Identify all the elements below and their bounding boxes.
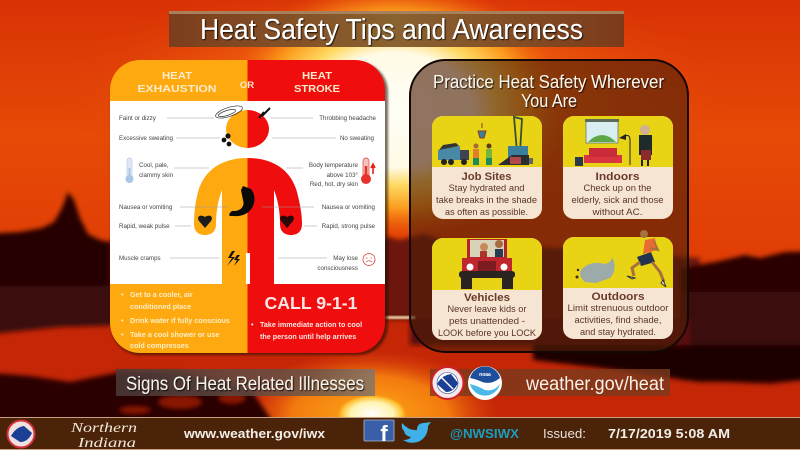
- text: Indoors: [596, 171, 640, 183]
- icon: dog and runner: [576, 230, 666, 287]
- exhaustion symptoms: clammy skin: [139, 172, 174, 179]
- text: elderly, sick and those: [572, 195, 664, 205]
- heading: heat exhaustion: HEAT: [162, 70, 193, 82]
- title: Heat Safety Tips and Awareness: [200, 14, 583, 46]
- exhaustion symptoms: Excessive sweating: [119, 135, 174, 142]
- text: Job Sites: [462, 171, 512, 183]
- exhaustion first aid: Take a cool shower or use: [130, 330, 219, 339]
- stroke symptoms: Throbbing headache: [319, 115, 377, 122]
- text: Stay hydrated and: [448, 183, 524, 193]
- text: Never leave kids or: [448, 304, 526, 314]
- text: without AC.: [591, 207, 642, 217]
- stroke symptoms: Body temperature: [309, 162, 359, 169]
- stroke first aid: Take immediate action to cool: [260, 320, 362, 329]
- icon: headache bolts: [259, 108, 270, 118]
- sun reflection: [339, 396, 406, 417]
- text: as often as possible.: [445, 207, 528, 217]
- icon: NOAA logo: noaa: [479, 372, 491, 378]
- title banner: [169, 11, 624, 47]
- exhaustion first aid: conditioned place: [130, 302, 191, 311]
- heading: heat stroke: [294, 70, 340, 95]
- heading: You Are: [521, 90, 577, 111]
- exhaustion symptoms: Nausea or vomiting: [119, 204, 173, 211]
- issued time: 7/17/2019 5:08 AM: [608, 426, 730, 441]
- exhaustion first aid: •: [121, 330, 124, 339]
- icon: facebook: f: [380, 421, 388, 446]
- text: take breaks in the shade: [436, 195, 537, 205]
- text: pets unattended -: [449, 316, 525, 326]
- text: Check up on the: [584, 183, 652, 193]
- icon: NWS logo small: [8, 420, 34, 448]
- stroke symptoms: May lose: [333, 255, 359, 262]
- symptom leader lines: [167, 118, 336, 258]
- heading: heat exhaustion: [138, 70, 216, 95]
- icon: room with sofa and elder: [575, 119, 652, 166]
- icon: twitter: [402, 422, 431, 443]
- icon: cool thermometer: [126, 158, 134, 183]
- exhaustion first aid: •: [121, 316, 124, 325]
- text: [572, 171, 664, 217]
- office name: Northern: [70, 421, 137, 436]
- icon: NWS logo: [432, 367, 464, 399]
- issued label: Issued:: [543, 427, 586, 441]
- stroke symptoms: Nausea or vomiting: [322, 204, 376, 211]
- website: www.weather.gov/iwx: [183, 426, 326, 441]
- panel: heat exhaustion vs heat stroke: [110, 60, 388, 355]
- exhaustion symptoms: Faint or dizzy: [119, 115, 157, 122]
- icon: red jeep with people: [459, 239, 515, 289]
- icon: stomach: [229, 186, 254, 216]
- stroke symptoms: No sweating: [340, 135, 375, 142]
- exhaustion symptoms: Cool, pale,: [139, 162, 169, 169]
- speckled dark bank patches: [119, 392, 246, 414]
- icon: sad face: [363, 254, 375, 266]
- icon: cramp lightning: [227, 251, 240, 266]
- exhaustion first aid: Get to a cooler, air: [130, 290, 193, 299]
- lower water: [0, 320, 800, 417]
- exhaustion symptoms: [119, 115, 174, 262]
- stroke symptoms: consciousness: [317, 265, 358, 272]
- body figure: [194, 103, 302, 284]
- caption: signs of heat related illnesses: Signs Of Heat Related Illnesses: [126, 374, 364, 395]
- text: Limit strenuous outdoor: [568, 303, 668, 313]
- bright water line: [385, 316, 415, 319]
- text: Outdoors: [592, 291, 644, 303]
- text: [436, 171, 537, 217]
- text: and stay hydrated.: [580, 327, 656, 337]
- icon: dizzy swirl: [214, 103, 244, 121]
- icon: NOAA logo: [468, 366, 502, 400]
- exhaustion symptoms: Rapid, weak pulse: [119, 223, 170, 230]
- icon: hot thermometer: [361, 158, 375, 184]
- card: job sites: [432, 116, 542, 219]
- stroke first aid: the person until help arrives: [260, 332, 356, 341]
- exhaustion symptoms: Muscle cramps: [119, 255, 161, 262]
- text: LOOK before you LOCK: [438, 328, 536, 338]
- footer bar: [0, 417, 800, 450]
- card: outdoors: [563, 230, 673, 339]
- stroke symptoms: Red, hot, dry skin: [310, 181, 359, 188]
- caption: weather.gov/heat with logos: [430, 366, 670, 400]
- stroke symptoms: Rapid, strong pulse: [322, 223, 376, 230]
- exhaustion first aid: [121, 290, 230, 350]
- card: indoors: [563, 116, 673, 219]
- heading: heat stroke: HEAT: [302, 70, 333, 82]
- text: Vehicles: [464, 292, 510, 304]
- stroke symptoms: [309, 115, 377, 272]
- heading: Practice Heat Safety Wherever: [433, 71, 664, 92]
- text: [568, 291, 668, 337]
- office name: [70, 421, 137, 450]
- label: or: OR: [240, 80, 254, 91]
- stroke first aid: •: [251, 320, 254, 329]
- stroke first aid: [251, 320, 362, 341]
- icon: heart right: [280, 216, 294, 228]
- exhaustion first aid: Drink water if fully conscious: [130, 316, 230, 325]
- heading: heat exhaustion: EXHAUSTION: [138, 83, 216, 95]
- icon: facebook: [364, 420, 394, 446]
- stroke symptoms: above 103°: [327, 172, 359, 179]
- icon: sweat drops: [222, 133, 231, 146]
- heading: [433, 71, 664, 111]
- panel: practice heat safety: [410, 60, 688, 352]
- exhaustion first aid: •: [121, 290, 124, 299]
- text: [438, 292, 536, 338]
- exhaustion first aid: cold compresses: [130, 341, 189, 350]
- icon: heart left: [198, 216, 212, 228]
- call 9-1-1: CALL 9-1-1: [264, 293, 358, 313]
- heading: heat stroke: STROKE: [294, 83, 340, 95]
- icon: truck, workers and crane: [438, 117, 533, 165]
- twitter handle: @NWSIWX: [450, 427, 520, 441]
- card: vehicles: [432, 238, 542, 340]
- tree line and banks: [0, 192, 800, 425]
- caption: weather.gov/heat with logos: weather.gov/heat: [525, 374, 665, 395]
- text: activities, find shade,: [574, 315, 662, 325]
